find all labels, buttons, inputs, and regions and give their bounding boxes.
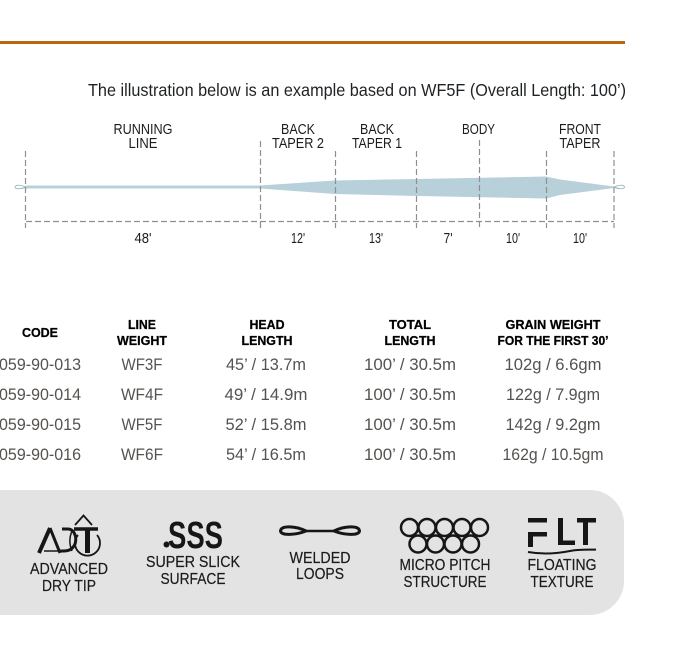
label [146, 554, 240, 588]
icon: SSS: SSS [168, 515, 223, 557]
column headings: LINE [128, 318, 156, 332]
fly line taper diagram [15, 122, 624, 247]
row WF5F [0, 416, 600, 434]
row WF3F: 059-90-013 [0, 356, 81, 374]
row WF5F: WF5F [122, 416, 162, 434]
column headings: LENGTH [384, 334, 436, 348]
icon: loops [280, 527, 360, 534]
row WF4F: 100’ / 30.5m [364, 386, 456, 404]
row WF4F [0, 386, 600, 404]
row WF4F: WF4F [121, 386, 163, 404]
column headings [22, 318, 608, 348]
section dividers and dimension line [26, 140, 614, 228]
section labels: RUNNING [114, 122, 172, 138]
section labels: LINE [128, 136, 158, 152]
row WF5F: 142g / 9.2gm [506, 416, 600, 434]
column headings: LENGTH [242, 334, 292, 348]
row WF6F: 54’ / 16.5m [226, 446, 306, 464]
row WF6F [0, 446, 604, 464]
column headings: FOR THE FIRST 30’ [498, 334, 608, 348]
section labels: BACK [360, 122, 394, 138]
label: ADVANCED [30, 561, 108, 578]
row WF5F: 52’ / 15.8m [226, 416, 306, 434]
label [30, 561, 108, 595]
feature: floating texture [528, 518, 596, 591]
section lengths: 10' [573, 231, 587, 247]
feature: advanced dry tip [30, 516, 108, 595]
line body shape [26, 176, 614, 198]
section labels: BACK [281, 122, 315, 138]
label [400, 557, 490, 591]
section lengths: 48' [134, 231, 152, 247]
section labels: TAPER [560, 136, 600, 152]
label: MICRO PITCH [400, 557, 490, 574]
section labels: TAPER 2 [272, 136, 324, 152]
label [528, 557, 596, 591]
intro sentence: The illustration below is an example based on WF5F (Overall Length: 100’) [88, 80, 626, 100]
section lengths: 13' [369, 231, 383, 247]
section labels: FRONT [559, 122, 601, 138]
row WF4F: 059-90-014 [0, 386, 81, 404]
icon: packed circles [401, 519, 488, 552]
row WF3F: 100’ / 30.5m [364, 356, 456, 374]
header rule [0, 41, 625, 44]
row WF4F: 122g / 7.9gm [506, 386, 600, 404]
section labels: TAPER 1 [352, 136, 402, 152]
label: SUPER SLICK [146, 554, 240, 571]
row WF6F: WF6F [121, 446, 163, 464]
row WF6F: 162g / 10.5gm [502, 446, 604, 464]
section lengths: 10' [506, 231, 520, 247]
row WF3F: WF3F [122, 356, 162, 374]
column headings: CODE [22, 326, 58, 340]
section labels [114, 122, 601, 152]
panel: features [0, 490, 624, 615]
column headings: GRAIN WEIGHT [506, 318, 601, 332]
column headings: HEAD [250, 318, 284, 332]
row WF4F: 49’ / 14.9m [224, 386, 308, 404]
feature: micro pitch structure [400, 519, 490, 591]
row WF3F: 45’ / 13.7m [226, 356, 306, 374]
label [290, 550, 350, 583]
label: LOOPS [296, 566, 344, 583]
label: STRUCTURE [404, 574, 486, 591]
section lengths [134, 231, 587, 247]
label: DRY TIP [42, 578, 96, 595]
section lengths: 12' [291, 231, 305, 247]
specification table [0, 318, 608, 464]
row WF6F: 100’ / 30.5m [364, 446, 456, 464]
row WF3F [0, 356, 602, 374]
feature: super slick surface [146, 515, 240, 588]
column headings: WEIGHT [117, 334, 167, 348]
section lengths: 7' [444, 231, 453, 247]
end loops [15, 185, 624, 189]
row WF3F: 102g / 6.6gm [504, 356, 602, 374]
row WF6F: 059-90-016 [0, 446, 81, 464]
column headings: TOTAL [389, 318, 431, 332]
feature: welded loops [280, 527, 360, 583]
label: WELDED [290, 550, 350, 567]
label: SURFACE [160, 571, 226, 588]
icon: FLT [528, 518, 596, 554]
row WF5F: 059-90-015 [0, 416, 81, 434]
label: TEXTURE [530, 574, 594, 591]
section labels: BODY [462, 122, 495, 138]
icon: ADT [39, 516, 100, 556]
row WF5F: 100’ / 30.5m [364, 416, 456, 434]
label: FLOATING [528, 557, 596, 574]
